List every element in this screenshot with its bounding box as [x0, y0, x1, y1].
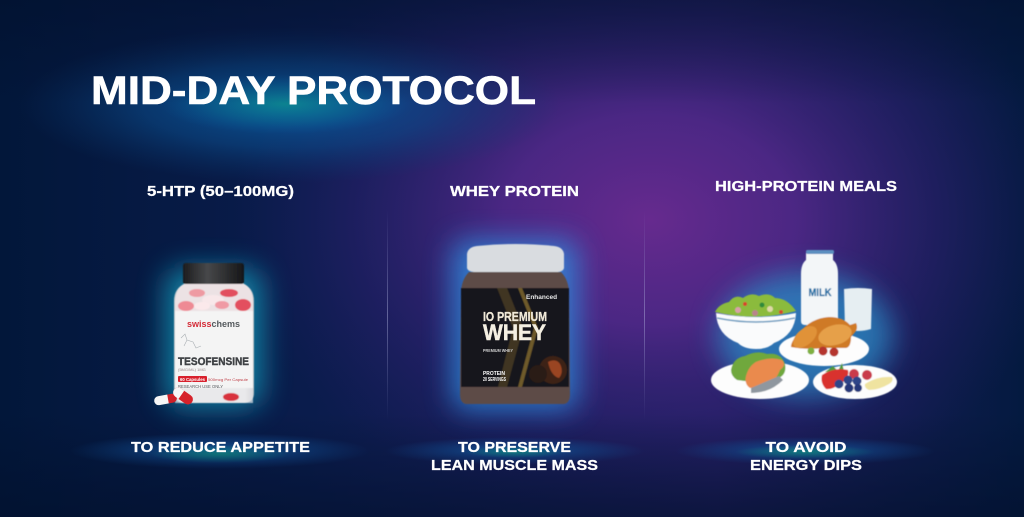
chicken plate — [779, 332, 869, 366]
title: MID-DAY PROTOCOL — [91, 69, 536, 113]
red tag — [178, 376, 249, 382]
column 3 caption — [750, 440, 862, 474]
berry plate — [813, 365, 897, 399]
chicken — [789, 317, 857, 356]
product: meal plates — [711, 250, 897, 399]
red tag: 60 Capsules — [180, 377, 205, 382]
column 2 caption: TO PRESERVE — [458, 440, 571, 456]
column 3 caption: ENERGY DIPS — [750, 458, 862, 474]
whey: WHEY — [483, 320, 546, 345]
milk bottle — [801, 250, 838, 325]
molecule — [181, 334, 201, 348]
research label: RESEARCH USE ONLY — [178, 384, 223, 389]
gold stripes — [497, 288, 523, 387]
product: supplement bottle — [153, 263, 263, 408]
column 1 heading: 5-HTP (50–100MG) — [147, 184, 294, 200]
product: whey protein tub — [452, 240, 578, 410]
column 1 caption: TO REDUCE APPETITE — [131, 440, 310, 456]
servings count: 20 SERVINGS — [483, 377, 506, 383]
milk glass — [844, 288, 872, 331]
milk bottle: MILK — [808, 287, 832, 299]
red tag: 500mcg Per Capsule — [208, 377, 249, 382]
product name: IO PREMIUM — [483, 310, 547, 324]
column 2 caption: LEAN MUSCLE MASS — [431, 458, 598, 474]
subline: PREMIUM WHEY — [483, 348, 513, 353]
bottle cap — [183, 263, 244, 284]
black label — [461, 288, 569, 387]
servings: PROTEIN — [483, 371, 505, 377]
tub body — [460, 272, 570, 404]
chocolate image — [529, 356, 567, 384]
column 3 caption: TO AVOID — [766, 440, 846, 456]
column 2 heading: WHEY PROTEIN — [450, 184, 579, 200]
column 3 heading: HIGH-PROTEIN MEALS — [715, 179, 897, 195]
brand: Enhanced — [526, 294, 557, 301]
tub lid — [467, 244, 564, 272]
salmon plate — [711, 361, 809, 399]
small label: (5MG/ML) 1MG — [178, 367, 206, 372]
product name: TESOFENSINE — [178, 356, 249, 368]
berries — [822, 363, 893, 392]
divider lines — [387, 210, 645, 420]
brand: swisschems — [187, 319, 240, 329]
bottle body — [174, 263, 254, 403]
salmon — [731, 352, 785, 393]
capsules — [153, 386, 195, 406]
salad bowl — [715, 294, 796, 349]
column 2 caption — [431, 440, 598, 474]
